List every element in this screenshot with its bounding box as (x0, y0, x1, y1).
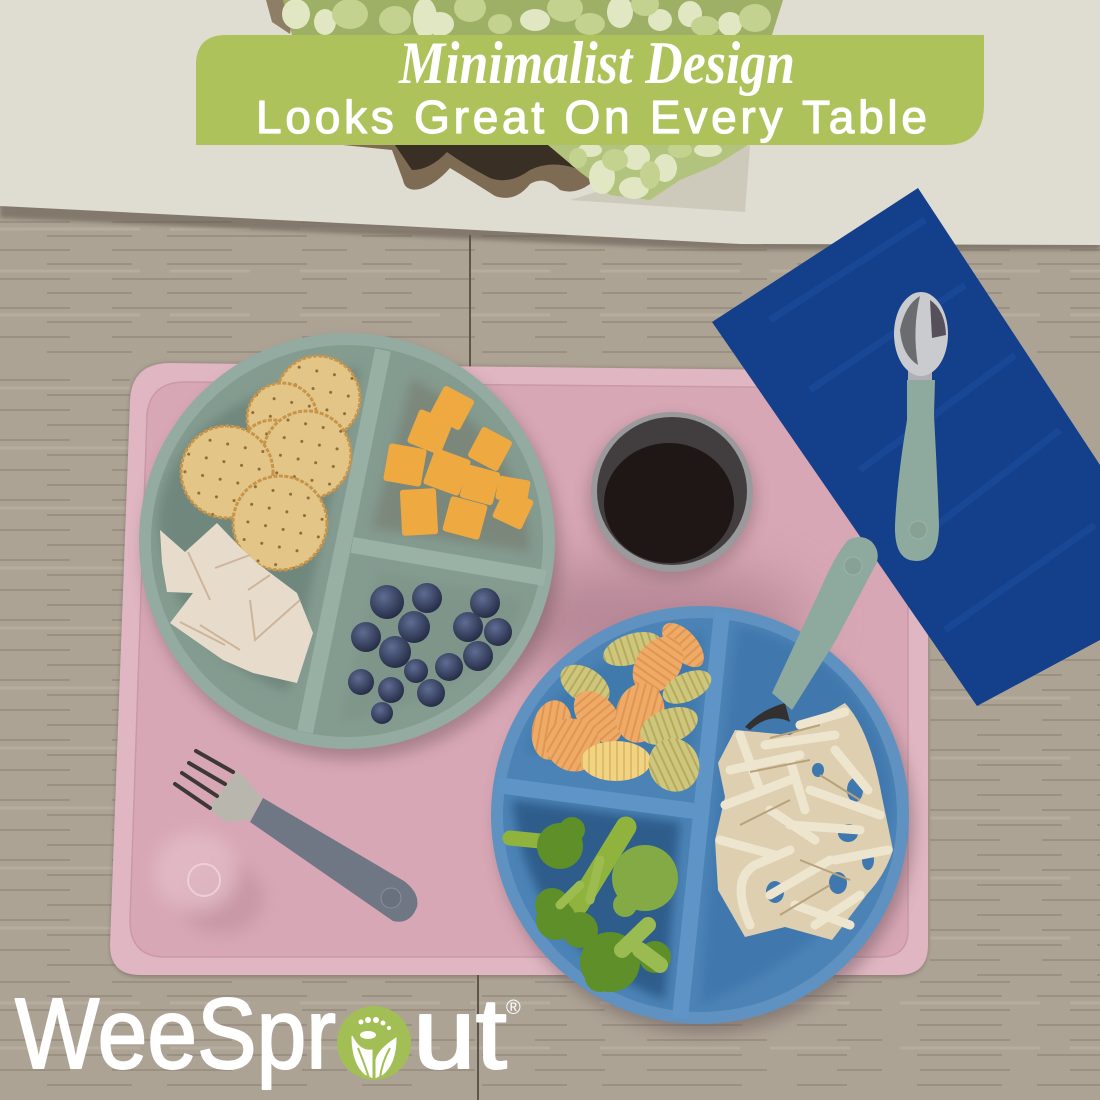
broccoli (510, 817, 678, 992)
shredded chicken (715, 703, 893, 940)
grey toddler fork (175, 751, 417, 922)
banner headline script: Minimalist Design (398, 30, 795, 96)
green toddler fork (745, 537, 878, 730)
blueberries (348, 583, 512, 724)
table runner cloth (0, 0, 1100, 250)
banner subheadline: Looks Great On Every Table (256, 91, 927, 143)
registered mark: ® (506, 997, 521, 1019)
logo wordmark end: ut (413, 978, 507, 1090)
flower bowl (266, 0, 783, 200)
sliced turkey (160, 523, 313, 683)
green divided plate (139, 330, 560, 759)
logo wordmark: WeeSpr (15, 978, 336, 1090)
blue divided plate (490, 600, 913, 1033)
spoon (894, 292, 948, 561)
blue napkin (712, 188, 1100, 706)
crackers (181, 356, 360, 570)
hydrangea flowers (282, 0, 783, 200)
crinkle chips (527, 616, 716, 800)
pink placemat (110, 363, 928, 977)
suction tab (154, 832, 264, 934)
logo sprout circle (337, 1006, 411, 1080)
cup (588, 412, 756, 578)
cheese cubes (383, 385, 534, 540)
banner (196, 30, 984, 145)
WeeSprout logo (15, 978, 521, 1090)
